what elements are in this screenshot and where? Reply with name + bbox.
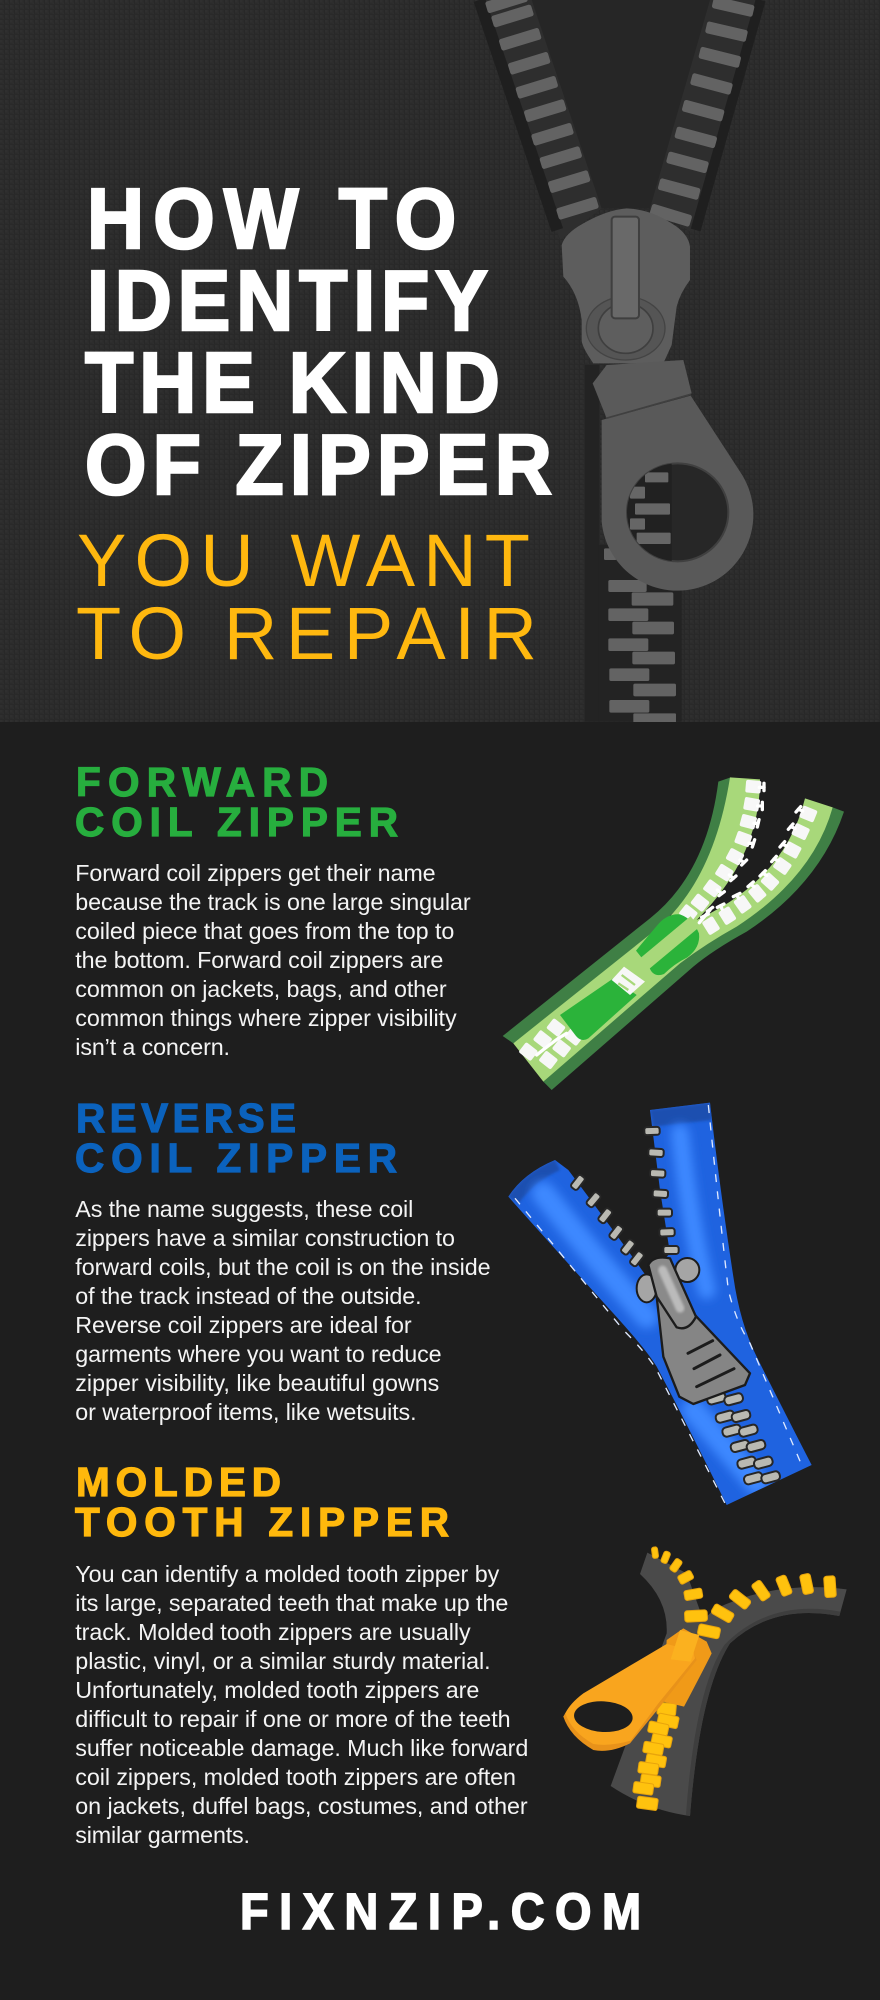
slider: pull tab — [657, 1297, 750, 1404]
text block: forward coil description: the bottom. Forward coil zippers are — [75, 947, 443, 973]
text block: reverse coil description: garments where you want to reduce — [75, 1341, 442, 1367]
title — [85, 172, 552, 513]
icon: yellow molded tooth zipper — [563, 1547, 847, 1816]
section: forward coil zipper — [75, 759, 471, 1060]
text block: reverse coil description: Reverse coil zippers are ideal for — [75, 1312, 412, 1338]
text block: molded tooth description: difficult to repair if one or more of the teeth — [75, 1706, 511, 1732]
heading: forward coil zipper: COIL ZIPPER — [75, 799, 398, 845]
photo: zipper slider body — [562, 208, 690, 363]
text block: forward coil description: coiled piece that goes from the top to — [75, 918, 454, 944]
subtitle — [76, 519, 537, 675]
slider: bridge — [671, 1630, 699, 1662]
heading: molded tooth zipper — [75, 1459, 449, 1545]
slider: ears — [637, 1258, 699, 1302]
title: OF ZIPPER — [85, 418, 552, 513]
text block: molded tooth description: plastic, vinyl, or a similar sturdy material. — [75, 1648, 491, 1674]
title: HOW TO — [87, 172, 456, 267]
text block: reverse coil description: of the track instead of the outside. — [75, 1283, 422, 1309]
text block: forward coil description: common on jackets, bags, and other — [75, 976, 447, 1002]
text block: molded tooth description: track. Molded tooth zippers are usually — [75, 1619, 471, 1645]
panel: header photo of a zipper on black fabric — [0, 0, 880, 723]
slider: bridge — [648, 1257, 696, 1328]
text block: molded tooth description: Unfortunately, molded tooth zippers are — [75, 1677, 479, 1703]
footer: website: FIXNZIP.COM — [240, 1884, 641, 1940]
text block: forward coil description: Forward coil zippers get their name — [75, 860, 436, 886]
slider: pull tab — [563, 1645, 697, 1751]
slider: lower block — [560, 978, 637, 1040]
text block: reverse coil description: As the name suggests, these coil — [75, 1196, 413, 1222]
text block: molded tooth description: suffer noticeable damage. Much like forward — [75, 1735, 528, 1761]
text block: forward coil description: isn’t a concern. — [75, 1034, 230, 1060]
title: IDENTIFY — [87, 254, 488, 349]
text block: molded tooth description: You can identify a molded tooth zipper by — [75, 1561, 500, 1587]
photo: lower zipper, pull tab — [585, 360, 753, 723]
subtitle: TO REPAIR — [76, 592, 537, 675]
text block: molded tooth description: coil zippers, molded tooth zippers are often — [75, 1764, 516, 1790]
text block: reverse coil description: zipper visibility, like beautiful gowns — [75, 1370, 439, 1396]
subtitle: YOU WANT — [77, 519, 530, 602]
slider: upper body — [636, 914, 699, 975]
text block: molded tooth description — [75, 1561, 528, 1848]
icon: green coil zipper — [503, 777, 844, 1090]
photo: open zipper top — [479, 0, 761, 363]
text block: reverse coil description: forward coils, but the coil is on the inside — [75, 1254, 491, 1280]
text block: molded tooth description: similar garments. — [75, 1822, 250, 1848]
heading: molded tooth zipper: TOOTH ZIPPER — [75, 1499, 449, 1545]
heading: molded tooth zipper: MOLDED — [76, 1459, 281, 1505]
heading: forward coil zipper: FORWARD — [76, 759, 328, 805]
heading: reverse coil zipper: REVERSE — [76, 1095, 296, 1141]
text block: molded tooth description: on jackets, duffel bags, costumes, and other — [75, 1793, 528, 1819]
heading: forward coil zipper — [75, 759, 398, 845]
icon: blue reverse coil zipper — [508, 1103, 812, 1505]
text block: forward coil description: because the track is one large singular — [75, 889, 471, 915]
section: reverse coil zipper — [75, 1095, 491, 1425]
slider: body — [663, 1628, 712, 1707]
title: THE KIND — [85, 336, 500, 431]
text block: reverse coil description: or waterproof items, like wetsuits. — [75, 1399, 417, 1425]
text block: reverse coil description — [75, 1196, 491, 1425]
text block: forward coil description — [75, 860, 471, 1060]
text block: reverse coil description: zippers have a similar construction to — [75, 1225, 455, 1251]
text block: forward coil description: common things where zipper visibility — [75, 1005, 457, 1031]
section: molded tooth zipper — [75, 1459, 528, 1848]
text block: molded tooth description: its large, separated teeth that make up the — [75, 1590, 508, 1616]
heading: reverse coil zipper — [75, 1095, 397, 1181]
heading: reverse coil zipper: COIL ZIPPER — [75, 1135, 397, 1181]
